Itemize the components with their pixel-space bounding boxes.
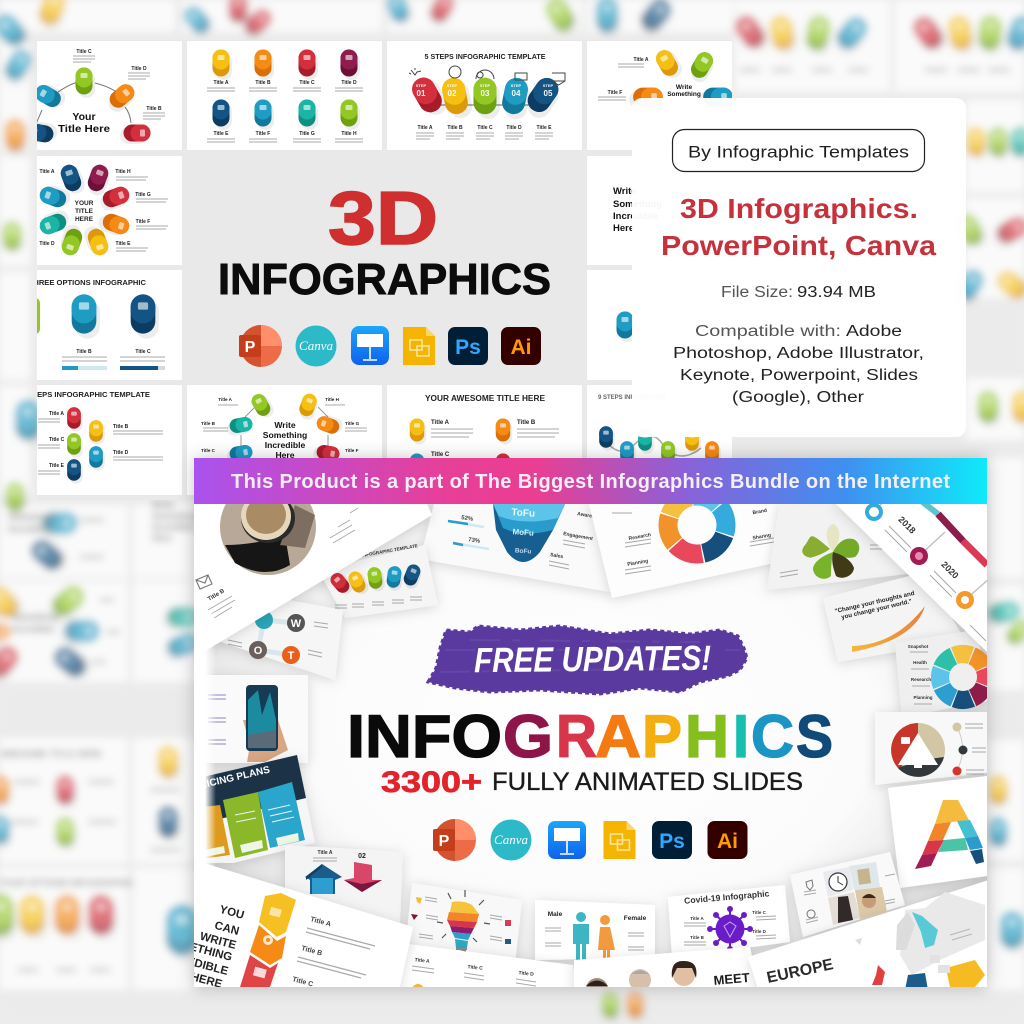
slide: covid-19 infographic: Title D — [752, 929, 767, 934]
icon: Canva: Canva — [494, 832, 528, 847]
slide: 5 steps infographic template: 02 — [448, 89, 457, 98]
slide: petal title: HERE — [75, 216, 94, 223]
slide: quote with brush — [823, 572, 965, 662]
slide: eight cylinder icons: Title E — [214, 131, 229, 137]
slide: funnel: Sales — [550, 552, 564, 560]
slide: 5 steps tilted: INFOGRAPHIC TEMPLATE — [361, 543, 418, 558]
slide: steps infographic template: Title C — [49, 437, 65, 443]
slide: write something cycle — [587, 41, 737, 150]
free updates brush banner — [428, 626, 747, 694]
slide: large tilted photo — [194, 504, 434, 652]
slide: arrows: Title A — [317, 850, 333, 856]
slide: your title here arc: Title C — [76, 49, 92, 55]
slide: write something incredible here — [187, 385, 382, 495]
slide: large tilted photo: Title B — [207, 588, 226, 603]
slide: title columns bottom: Title D — [518, 970, 534, 978]
card title: PowerPoint, Canva — [661, 230, 936, 261]
slide: steps infographic template: Title D — [113, 450, 129, 456]
slide: green flower — [767, 500, 925, 590]
slide: write something text: Write — [613, 186, 637, 197]
slide: you can write: CAN — [213, 920, 240, 938]
slide: you can write: Title A — [309, 916, 332, 928]
heading: INFOGRAPHICS colourful: I — [733, 703, 749, 770]
slide: steps infographic template: Title B — [113, 424, 129, 430]
gradient banner: This Product is a part of The Biggest Infographics Bundle on the Internet — [231, 471, 950, 493]
heading: INFOGRAPHICS colourful — [347, 703, 833, 770]
bundle promo panel — [194, 458, 987, 987]
slide: SWOT options: T — [288, 650, 295, 662]
slide: photo grid — [790, 852, 905, 937]
slide: you can write — [185, 860, 413, 1004]
slide: funnel: 52% — [461, 515, 474, 523]
slide: write something incredible here: Something — [263, 430, 307, 440]
compatible with: (Google), Other — [732, 389, 864, 406]
slide: covid-19 infographic: Title A — [690, 916, 704, 921]
info card — [632, 98, 966, 437]
icon: Photoshop: Ps — [455, 336, 481, 359]
compatible with: Compatible with: — [695, 323, 841, 340]
slide: funnel: MoFu — [512, 527, 534, 538]
icon: PowerPoint: P — [439, 833, 450, 850]
slide: petal title: YOUR — [75, 200, 94, 207]
badge: by infographic templates — [672, 130, 924, 172]
blurred slide collage background: FOUR OPTIONS INFOGRAPHIC — [0, 878, 135, 888]
slide: you can write: EDIBLE — [185, 955, 230, 978]
slide: diagonal timeline: 2018 — [896, 514, 918, 536]
slide: write something text: Something — [613, 199, 662, 210]
slide: write something incredible here: Write — [274, 420, 296, 430]
slide: covid-19 infographic: Covid-19 Infographic — [684, 888, 770, 906]
slide: three segment circle — [875, 712, 995, 785]
slide: pricing plans: PRICING PLANS — [192, 765, 271, 793]
heading: INFOGRAPHICS colourful: R — [556, 703, 597, 770]
slide: 5 steps infographic template: Title D — [506, 125, 522, 131]
slide: you can write: ETHING — [188, 941, 233, 964]
heading: INFOGRAPHICS colourful: C — [751, 703, 794, 770]
slide: funnel — [420, 500, 610, 592]
slide: eight cylinder icons: Title A — [213, 80, 229, 86]
slide: your awesome title here: YOUR AWESOME TITLE HERE — [425, 394, 545, 403]
slide: your awesome title here: Title A — [431, 420, 450, 426]
badge: by infographic templates: By Infographic Templates — [688, 142, 909, 162]
slide: wheel — [895, 630, 995, 717]
card title — [661, 193, 936, 261]
slide: you can write: YOU — [218, 904, 245, 922]
free updates brush banner: FREE UPDATES! — [474, 639, 712, 680]
blurred slide collage background: Incredible — [8, 524, 51, 534]
heading: INFOGRAPHICS colourful: H — [685, 703, 729, 770]
slide: write something incredible here: Here — [275, 450, 295, 460]
slide: your title here arc: Title D — [131, 66, 147, 72]
icon: Google Slides — [604, 821, 636, 859]
slide: 5 steps tilted — [318, 543, 438, 618]
slide: male female: Female — [624, 915, 647, 922]
slide: write something incredible here: Title G — [345, 421, 360, 426]
slide: your title here arc: Title B — [146, 106, 162, 112]
slide: europe map: EUROPE — [765, 956, 835, 987]
slide: funnel: Awareness — [577, 511, 604, 522]
slide: 5 steps infographic template: 05 — [544, 89, 553, 98]
app icons row panel — [433, 819, 748, 861]
slide: male female — [535, 900, 655, 960]
blurred slide collage background: Something — [12, 612, 58, 622]
slide: write something cycle: Something — [667, 91, 701, 98]
slide: write something incredible here: Title H — [325, 397, 340, 402]
slide: covid-19 infographic: Title C — [752, 910, 767, 915]
file size — [721, 284, 876, 301]
slide: A logo — [888, 775, 995, 888]
icon: Photoshop — [448, 327, 488, 365]
slide: write something text: Incredible — [613, 211, 658, 222]
slide: steps infographic template — [27, 385, 182, 495]
slide: 5 steps infographic template: STEP — [543, 83, 554, 88]
slide: eight cylinder icons: Title D — [341, 80, 357, 86]
slide: wheel: Health — [913, 660, 927, 665]
slide: your awesome title here: Title B — [517, 420, 536, 426]
slide: write something incredible here: Title A — [218, 397, 233, 402]
slide: petal title: Title F — [136, 219, 150, 225]
slide: arrows — [285, 845, 403, 925]
slide: quote with brush: you change your world." — [841, 598, 913, 621]
slide: 5 steps infographic template: 01 — [417, 89, 426, 98]
slide: write something text: Here — [613, 223, 634, 234]
slide: write something cycle: Title F — [608, 90, 622, 96]
slide: steps infographic template: Title A — [49, 411, 64, 417]
slide: wheel: Research — [911, 677, 931, 682]
slide: meet the team — [574, 947, 760, 1000]
slide: donut: Research — [628, 532, 651, 542]
slide: SWOT options: W — [291, 618, 302, 630]
subheading: 3300+ fully animated slides: 3300+ — [381, 766, 482, 799]
slide: funnel: ToFu — [511, 507, 535, 520]
subheading: 3300+ fully animated slides — [381, 766, 803, 799]
slide: 5 steps infographic template: STEP — [480, 83, 491, 88]
slide: 5 steps infographic template: 04 — [512, 89, 521, 98]
blurred slide collage background: Something — [152, 511, 198, 521]
slide: petal title — [30, 156, 182, 265]
slide: donut: Planning — [627, 558, 649, 568]
heading: 3D: 3D — [328, 176, 438, 260]
heading: INFOGRAPHICS colourful: INFO — [347, 703, 502, 770]
heading: INFOGRAPHICS colourful: A — [595, 703, 641, 770]
slide: diagonal timeline — [832, 500, 995, 660]
slide: write something cycle: Write — [676, 84, 692, 91]
slide: write something incredible here: Title B — [201, 421, 216, 426]
blurred slide collage background: Incredible — [152, 522, 195, 532]
slide: write something incredible here: Title F — [345, 448, 359, 453]
slide: light bulb — [405, 883, 522, 965]
slide: funnel: BoFu — [515, 547, 532, 556]
slide: 5 steps infographic template: Title E — [537, 125, 552, 131]
icon: PowerPoint: P — [245, 339, 256, 356]
slide: male female: Male — [548, 911, 563, 918]
icon: Canva — [296, 326, 336, 366]
slide: you can write: Title B — [300, 945, 323, 957]
slide: steps infographic template: Title E — [49, 463, 65, 469]
slide: your title here arc — [25, 41, 182, 150]
slide: quote with brush: "Change your thoughts and — [834, 590, 915, 615]
icon: Google Slides — [403, 327, 435, 365]
slide: wheel: Planning — [914, 695, 933, 700]
slide: your title here arc: Your — [72, 111, 96, 123]
left soft edge — [194, 610, 216, 872]
slide: 5 steps infographic template: Title B — [447, 125, 463, 131]
slide: you can write: WRITE — [198, 931, 238, 952]
icon: Keynote — [351, 326, 389, 365]
slide: teal column — [587, 270, 634, 380]
slide: eight cylinder icons — [187, 41, 382, 150]
slide: three options infographic: Title C — [135, 349, 151, 355]
app icons row — [239, 325, 541, 367]
slide: meet the team: MEET — [713, 970, 750, 988]
icon: Illustrator — [501, 327, 541, 365]
heading: INFOGRAPHICS colourful: G — [503, 703, 553, 770]
slide: eight cylinder icons: Title C — [299, 80, 315, 86]
slide: 5 steps infographic template: 5 STEPS INFOGRAPHIC TEMPLATE — [424, 52, 546, 61]
icon: Photoshop: Ps — [659, 830, 685, 853]
icon: Photoshop — [652, 821, 692, 859]
slide: your awesome title here: Title C — [431, 452, 450, 458]
slide: three options infographic — [29, 270, 182, 380]
slide: three options infographic: THREE OPTIONS INFOGRAPHIC — [29, 278, 147, 287]
slide: covid-19 infographic — [668, 885, 790, 958]
slide: petal title: Title D — [39, 241, 55, 247]
heading: INFOGRAPHICS colourful: S — [796, 703, 833, 770]
heading: INFOGRAPHICS: INFOGRAPHICS — [218, 255, 551, 304]
icon: virus — [707, 906, 753, 952]
file size: File Size: — [721, 284, 793, 301]
slide: phone photo — [190, 675, 308, 763]
hexagon stack — [240, 893, 296, 987]
subheading: 3300+ fully animated slides: FULLY ANIMATED SLIDES — [492, 768, 803, 796]
slide: 9 steps timeline — [587, 385, 732, 458]
slide: 5 steps infographic template: Title C — [477, 125, 493, 131]
blurred slide collage background: Incredible — [12, 624, 55, 634]
slide: 5 steps infographic template: 03 — [481, 89, 490, 98]
icon: Keynote — [548, 821, 586, 859]
slide: 5 steps infographic template — [387, 41, 582, 150]
blurred slide collage background: AWESOME TITLE HERE — [0, 749, 102, 759]
slide: write something incredible here: Title C — [201, 448, 216, 453]
slide: petal title: Title E — [116, 241, 131, 247]
slide: title columns bottom — [400, 943, 578, 996]
slide: you can write: Title C — [291, 976, 314, 988]
slide: 5 steps infographic template: STEP — [447, 83, 458, 88]
slide: wheel: Snapshot — [908, 644, 929, 649]
slide: eight cylinder icons: Title H — [341, 131, 357, 137]
slide: 5 steps infographic template: STEP — [416, 83, 427, 88]
icon: Illustrator: Ai — [717, 830, 738, 853]
slide: funnel: Engagement — [563, 531, 594, 542]
slide: title columns bottom: Title A — [414, 957, 430, 965]
slide: steps infographic template: STEPS INFOGRAPHIC TEMPLATE — [27, 390, 150, 399]
gradient banner — [194, 458, 987, 504]
icon: Illustrator: Ai — [510, 336, 532, 359]
slide: 9 steps timeline: 9 STEPS INFOGRAPHIC — [598, 395, 667, 401]
slide: eight cylinder icons: Title B — [255, 80, 271, 86]
slide: eight cylinder icons: Title G — [299, 131, 315, 137]
slide: petal title: Title H — [115, 169, 131, 175]
slide: write something text — [587, 156, 661, 265]
slide: diagonal timeline: 2020 — [939, 559, 961, 581]
slide: pricing plans — [192, 755, 315, 863]
slide: petal title: Title G — [135, 192, 151, 198]
slide: SWOT options: O — [254, 645, 263, 657]
slide: europe map — [748, 878, 995, 995]
slide: funnel: 73% — [468, 537, 481, 545]
blurred slide collage background: Write — [152, 500, 174, 510]
slide: your title here arc: Title Here — [58, 123, 110, 135]
slide: your awesome title here — [387, 385, 582, 458]
blurred slide collage background: Something — [8, 512, 54, 522]
slide: you can write: HERE — [189, 971, 224, 991]
slide: petal title: Title A — [39, 169, 55, 175]
icon: Canva: Canva — [299, 338, 333, 353]
icon: Illustrator — [708, 821, 748, 859]
slide: SWOT options — [215, 595, 343, 680]
compatible with — [673, 323, 924, 406]
heading: INFOGRAPHICS colourful: P — [642, 703, 682, 770]
compatible with: Keynote, Powerpoint, Slides — [680, 367, 918, 384]
slide: eight cylinder icons: Title F — [256, 131, 270, 137]
compatible with: Adobe — [846, 323, 902, 340]
blurred slide collage background: Here — [152, 533, 172, 543]
main 3D infographics preview collage — [25, 40, 737, 500]
slide: write something cycle: Title A — [633, 57, 649, 63]
slide: petal title: TITLE — [75, 208, 94, 215]
icon: PowerPoint — [433, 819, 476, 861]
slide: 5 steps infographic template: Title A — [417, 125, 433, 131]
slide: arrows: 02 — [358, 853, 366, 860]
card title: 3D Infographics. — [680, 193, 918, 224]
slide: write something incredible here: Incredible — [265, 440, 306, 450]
compatible with: Photoshop, Adobe Illustrator, — [673, 345, 924, 362]
slide: donut: Brand — [752, 508, 767, 516]
slide: 5 steps infographic template: STEP — [511, 83, 522, 88]
file size: 93.94 MB — [797, 284, 876, 301]
slide: title columns bottom: Title C — [467, 964, 483, 972]
slide: covid-19 infographic: Title B — [690, 935, 705, 940]
icon: Canva — [490, 820, 532, 860]
slide: donut — [586, 504, 780, 602]
slide: three options infographic: Title B — [76, 349, 92, 355]
icon: PowerPoint — [239, 325, 282, 367]
slide: donut: Sharing — [752, 532, 772, 542]
